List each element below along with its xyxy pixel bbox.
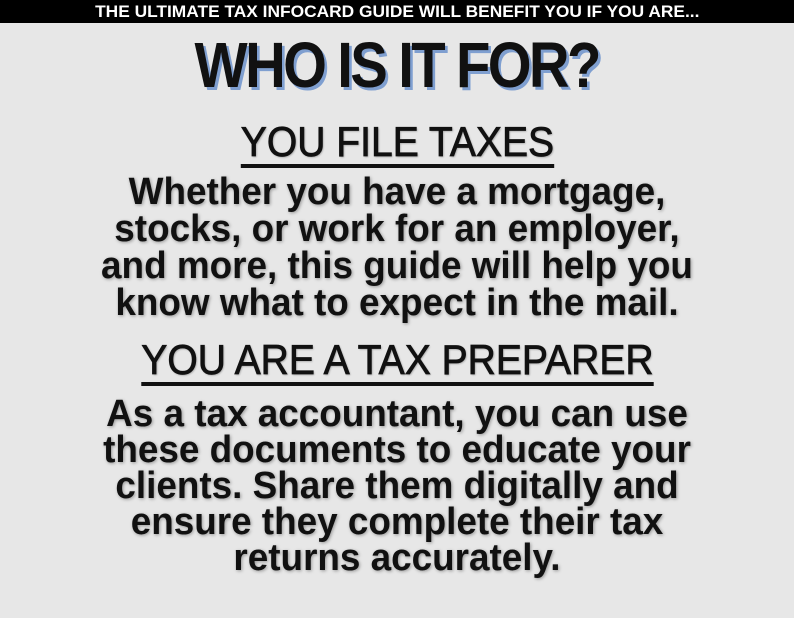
heading: tax preparer: YOU ARE A TAX PREPARER	[141, 336, 653, 383]
text: file taxes description: stocks, or work for an employer,	[114, 208, 680, 250]
text: file taxes description	[101, 171, 694, 326]
text: tax preparer description: these documents to educate your	[103, 429, 691, 471]
text: tax preparer description	[102, 393, 693, 581]
text: tax preparer description: As a tax accountant, you can use	[106, 393, 688, 435]
text: file taxes description: know what to expect in the mail.	[115, 282, 679, 324]
text: tax preparer description: ensure they complete their tax	[131, 501, 663, 543]
top banner	[0, 0, 794, 23]
text: tax preparer description: clients. Share them digitally and	[115, 465, 679, 507]
text: tax preparer description: returns accurately.	[233, 537, 561, 579]
text: file taxes description: Whether you have a mortgage,	[129, 171, 665, 213]
heading: you file taxes: YOU FILE TAXES	[240, 118, 554, 165]
top banner: THE ULTIMATE TAX INFOCARD GUIDE WILL BENEFIT YOU IF YOU ARE...	[95, 2, 699, 21]
text: file taxes description: and more, this guide will help you	[101, 245, 693, 287]
title: WHO IS IT FOR?	[195, 29, 599, 101]
